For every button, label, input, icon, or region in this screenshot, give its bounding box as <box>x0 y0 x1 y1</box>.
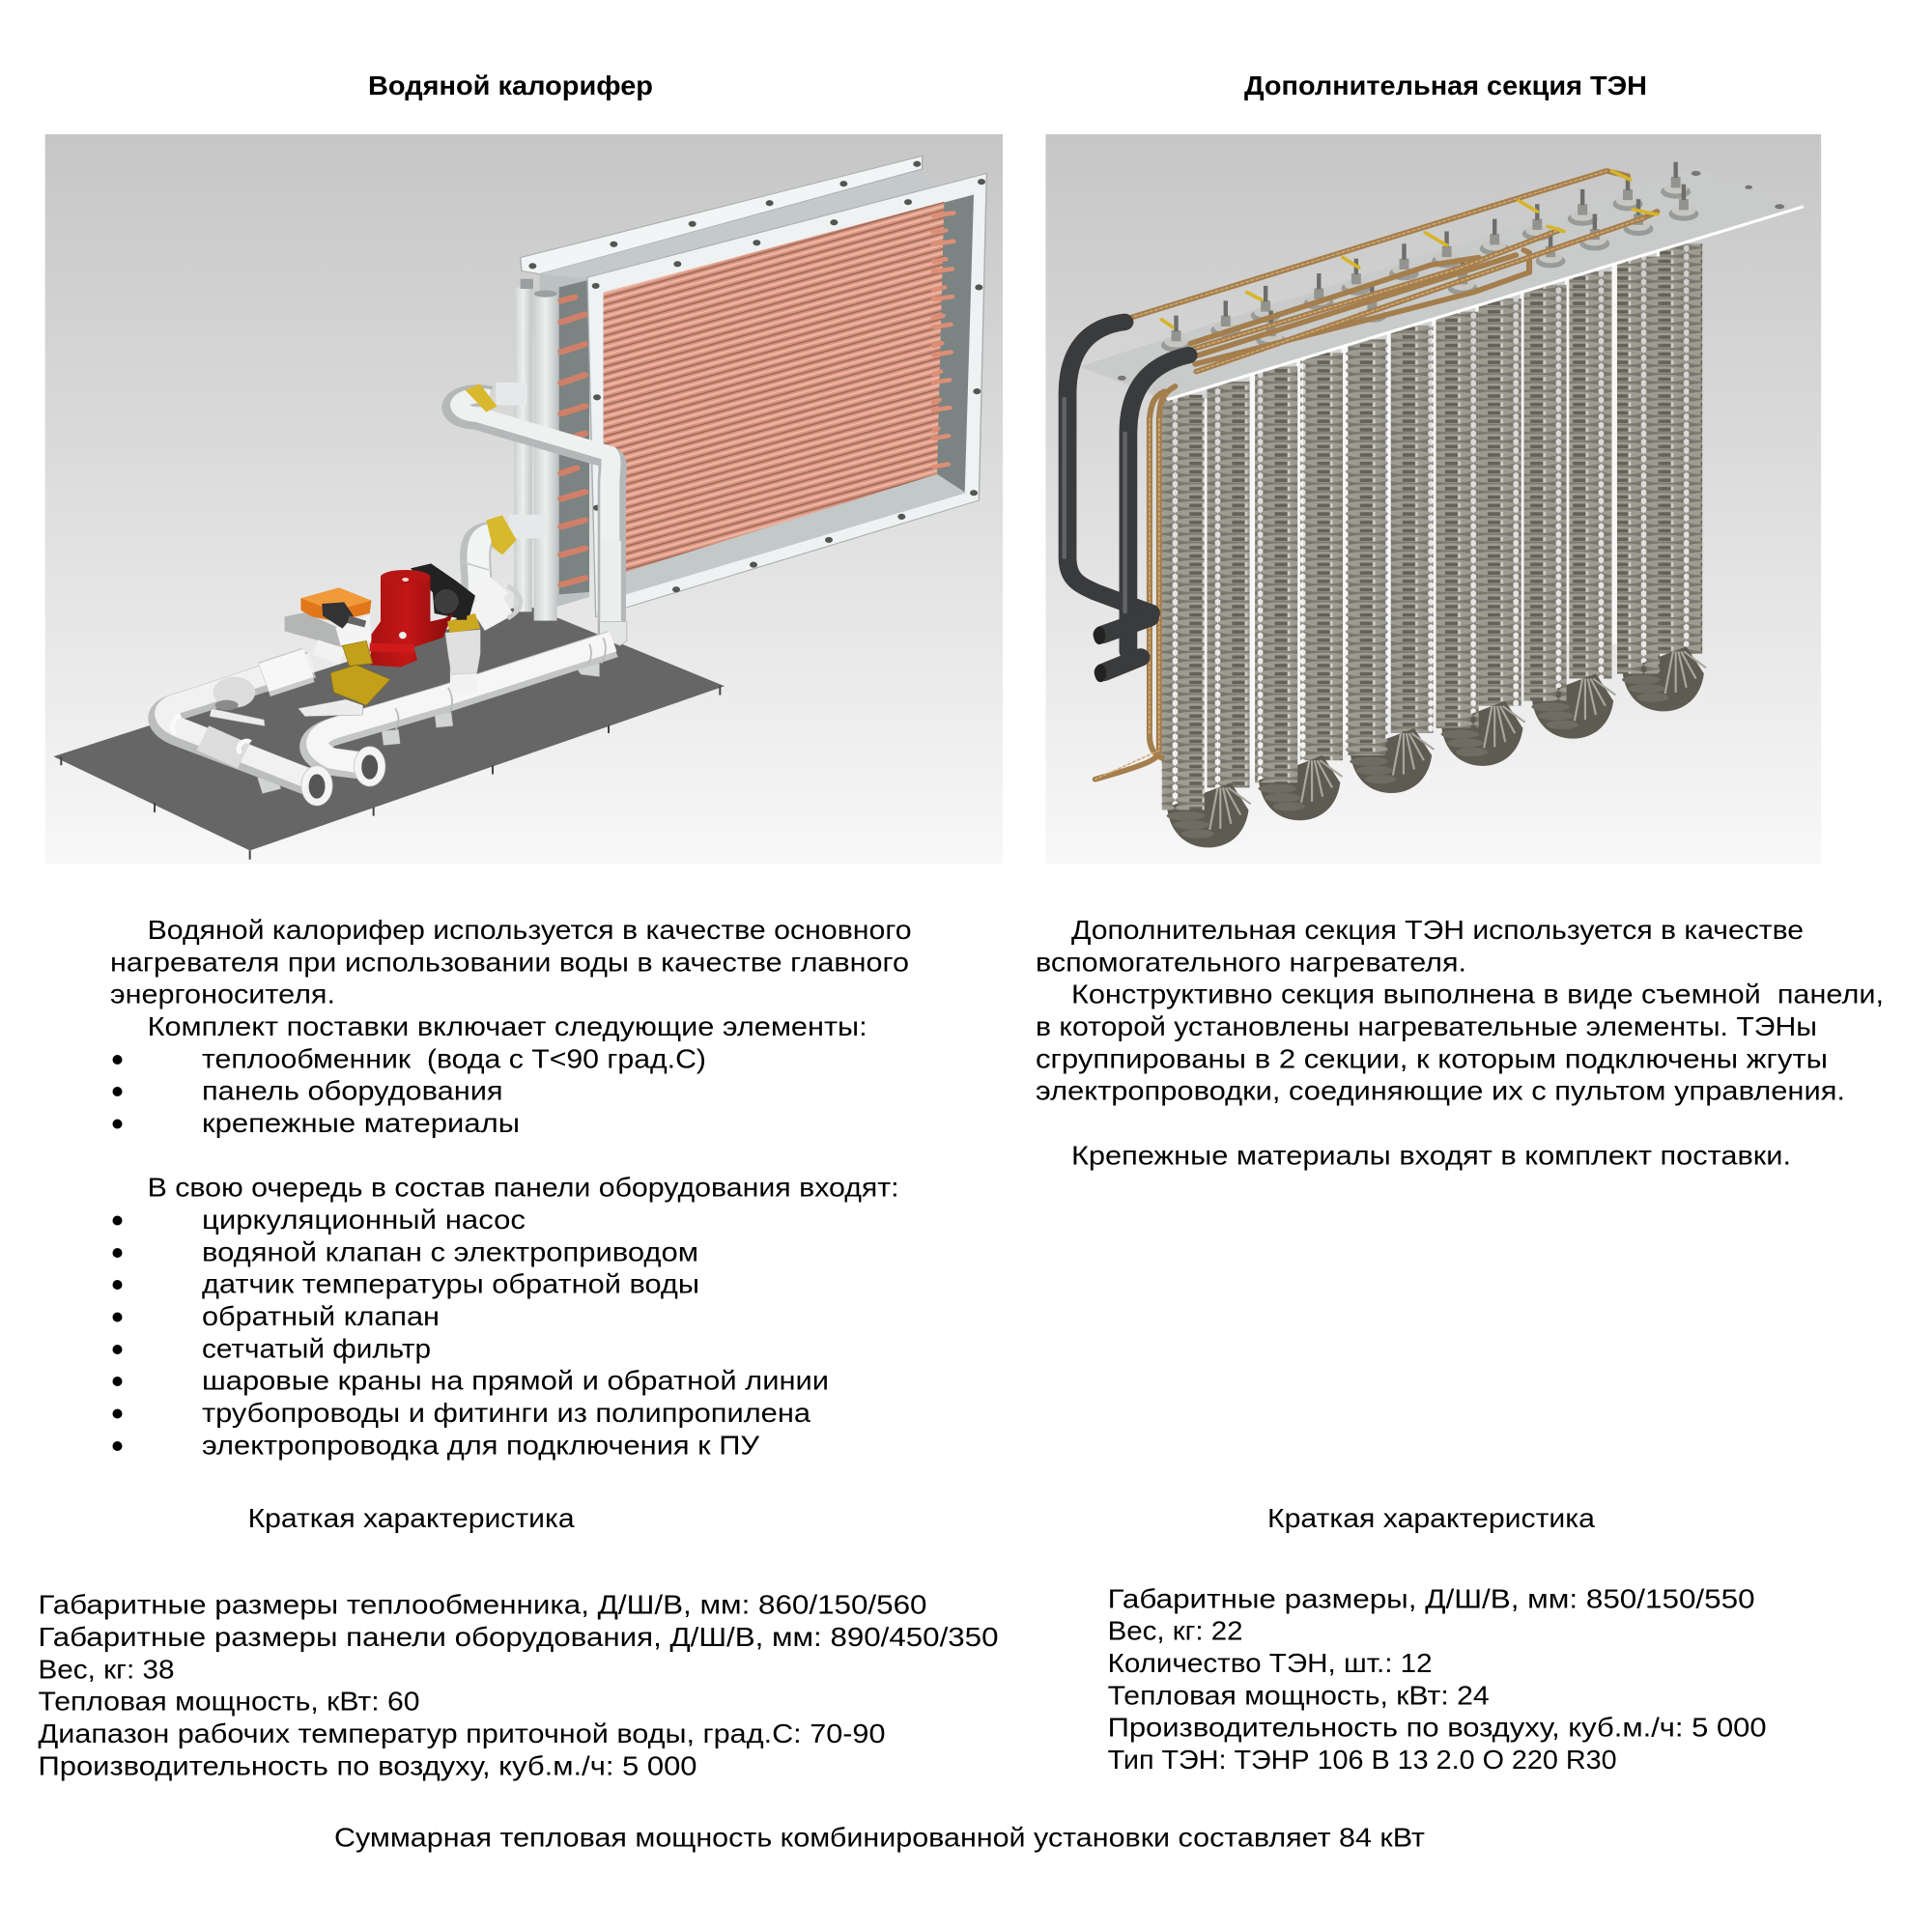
list: equipment panel contents <box>112 1173 899 1460</box>
inlet ring left <box>301 766 332 806</box>
lower supply stub <box>475 515 546 597</box>
list: delivery set: крепежные материалы <box>202 1108 520 1138</box>
white gaps between heater columns <box>1203 250 1663 790</box>
main supply pipe <box>314 641 613 766</box>
black terminal box <box>411 563 475 620</box>
text block: TEN section description: Конструктивно секция выполнена в виде съемной панели, <box>1071 980 1884 1009</box>
title: water heater: Водяной калорифер <box>368 71 653 100</box>
list: equipment panel contents: электропроводка для подключения к ПУ <box>202 1430 759 1460</box>
ball valve levers <box>210 699 363 726</box>
panel: water heater illustration <box>45 134 1003 865</box>
list: equipment panel contents: шаровые краны на прямой и обратной линии <box>202 1366 829 1396</box>
circulation pump <box>370 570 453 668</box>
text block: TEN section description: вспомогательного нагревателя. <box>1036 947 1466 977</box>
mounting plate <box>1079 168 1804 400</box>
list: equipment panel contents: датчик температуры обратной воды <box>202 1269 699 1299</box>
specs: water heater: Производительность по воздуху, куб.м./ч: 5 000 <box>39 1750 697 1780</box>
specs: TEN section: Производительность по воздуху, куб.м./ч: 5 000 <box>1108 1713 1767 1743</box>
heading: brief specs left: Краткая характеристика <box>248 1503 575 1533</box>
specs: TEN section <box>1108 1583 1767 1775</box>
text block: water heater description: Комплект поставки включает следующие элементы: <box>148 1011 867 1041</box>
upper return pipe <box>456 384 612 639</box>
wire harnesses <box>1095 171 1657 780</box>
text block: TEN section description: электропроводки, соединяющие их с пультом управления. <box>1036 1076 1845 1106</box>
text block: water heater description: нагревателя при использовании воды в качестве главного <box>110 947 909 977</box>
specs: TEN section: Вес, кг: 22 <box>1108 1616 1243 1646</box>
heat exchanger <box>521 156 986 616</box>
list: delivery set: панель оборудования <box>202 1076 503 1106</box>
text block: TEN section description: сгруппированы в 2 секции, к которым подключены жгуты <box>1036 1043 1828 1073</box>
heating elements with fins <box>1162 243 1706 847</box>
text block: TEN section description: в которой установлены нагревательные элементы. ТЭНы <box>1036 1011 1817 1041</box>
list: equipment panel contents: обратный клапан <box>202 1301 440 1331</box>
specs: TEN section: Количество ТЭН, шт.: 12 <box>1108 1648 1433 1678</box>
panel: TEN section illustration <box>1045 134 1821 865</box>
text block: TEN section description: Дополнительная секция ТЭН используется в качестве <box>1071 915 1804 945</box>
collector manifolds <box>514 279 557 621</box>
specs: TEN section: Габаритные размеры, Д/Ш/В, мм: 850/150/550 <box>1108 1583 1755 1613</box>
text block: water heater description: Водяной калорифер используется в качестве основного <box>148 915 912 945</box>
specs: TEN section: Тепловая мощность, кВт: 24 <box>1108 1680 1490 1710</box>
list: equipment panel contents: сетчатый фильтр <box>202 1333 431 1363</box>
fittings on main pipe <box>395 638 606 731</box>
text block: water heater description <box>110 915 912 1041</box>
return pipe <box>162 663 319 785</box>
specs: water heater: Габаритные размеры панели оборудования, Д/Ш/В, мм: 890/450/350 <box>39 1622 999 1652</box>
list: delivery set: теплообменник (вода с Т<90 град.С) <box>202 1043 706 1073</box>
valve actuator <box>285 587 371 657</box>
brass fittings <box>330 640 390 705</box>
text block: TEN section description <box>1036 915 1884 1170</box>
list: equipment panel contents: трубопроводы и фитинги из полипропилена <box>202 1398 810 1428</box>
title: TEN section: Дополнительная секция ТЭН <box>1244 71 1647 100</box>
summary line: Суммарная тепловая мощность комбинированной установки составляет 84 кВт <box>334 1823 1425 1853</box>
black insulated cables <box>1065 322 1188 682</box>
specs: water heater: Вес, кг: 38 <box>39 1654 174 1684</box>
text block: TEN section description: Крепежные материалы входят в комплект поставки. <box>1071 1140 1791 1170</box>
specs: water heater: Габаритные размеры теплообменника, Д/Ш/В, мм: 860/150/560 <box>39 1590 927 1620</box>
equipment assembly: pump, valve, pipes <box>162 541 627 806</box>
list: equipment panel contents: В свою очередь в состав панели оборудования входят: <box>148 1173 899 1203</box>
specs: water heater: Диапазон рабочих температур приточной воды, град.С: 70-90 <box>39 1719 885 1748</box>
temperature sensor <box>445 607 480 674</box>
right elbow to pump <box>462 562 521 618</box>
heading: brief specs right: Краткая характеристика <box>1267 1503 1595 1533</box>
list: equipment panel contents: циркуляционный насос <box>202 1205 526 1235</box>
terminals <box>1161 162 1698 353</box>
specs: water heater <box>39 1590 999 1780</box>
text block: water heater description: энергоносителя. <box>110 980 335 1009</box>
inlet ring right <box>354 747 385 786</box>
equipment base plate <box>53 605 725 860</box>
vertical pipe collar <box>600 541 627 645</box>
ball valve body <box>213 677 255 710</box>
specs: water heater: Тепловая мощность, кВт: 60 <box>39 1687 419 1717</box>
list: equipment panel contents: водяной клапан с электроприводом <box>202 1236 698 1266</box>
pipe clamps <box>257 664 600 794</box>
specs: TEN section: Тип ТЭН: ТЭНР 106 В 13 2.0 О 220 R30 <box>1108 1745 1617 1775</box>
list: delivery set <box>112 1043 706 1138</box>
